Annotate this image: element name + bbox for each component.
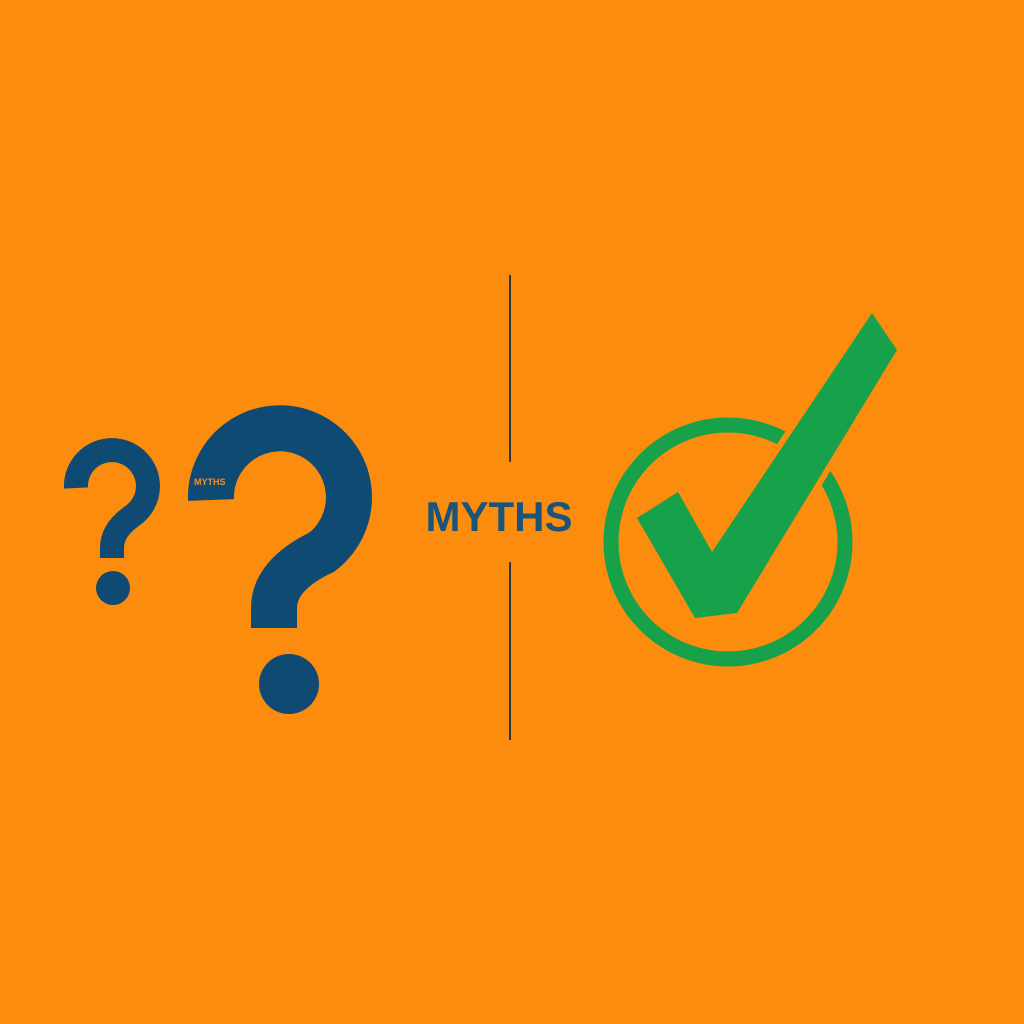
icon: large question mark: [194, 428, 349, 714]
heading: MYTHS: MYTHS: [426, 493, 572, 540]
divider line: [509, 275, 511, 740]
icon: small question mark: [76, 450, 148, 605]
icon: green check in circle: [611, 313, 897, 659]
small label on question mark: MYTHS: [194, 477, 226, 487]
